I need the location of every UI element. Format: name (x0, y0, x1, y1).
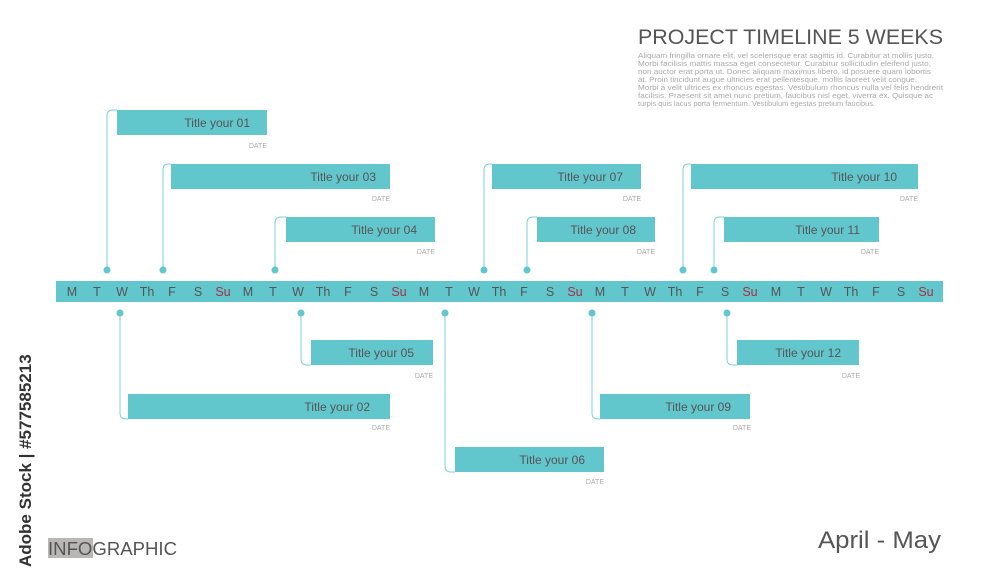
timeline day bar: W (292, 285, 304, 299)
timeline day bar: T (269, 285, 277, 299)
event 01: DATE (249, 143, 267, 150)
timeline day bar: W (468, 285, 480, 299)
event 09 (600, 394, 751, 432)
timeline day bar: F (696, 285, 704, 299)
timeline day bar: Th (844, 285, 858, 299)
event 01: Title your 01 (184, 116, 250, 130)
timeline day bar: T (93, 285, 101, 299)
event 04 (286, 217, 435, 256)
infographic label: INFOGRAPHIC (48, 539, 177, 559)
event 05 (311, 340, 433, 380)
timeline day bar: Su (742, 285, 758, 299)
timeline day bar: T (445, 285, 453, 299)
event 11: Title your 11 (795, 223, 860, 237)
timeline day bar: W (820, 285, 832, 299)
description text: non auctor erat porta ut. Donec aliquam maximus libero, id posuere quam lobortis (638, 69, 932, 76)
description text (638, 53, 943, 108)
event 04: DATE (417, 249, 435, 256)
event 07: Title your 07 (557, 170, 623, 184)
timeline day bar: S (897, 285, 905, 299)
event 07: DATE (623, 196, 641, 203)
event 09: DATE (733, 425, 751, 432)
description text: at. Proin tincidunt augue ultricies erat pellentesque, mollis laoreet velit congue. (638, 77, 917, 84)
timeline day bar: S (370, 285, 378, 299)
timeline day bar: Th (140, 285, 154, 299)
description text: turpis quis lacus porta fermentum. Vestibulum egestas pretium faucibus. (638, 101, 875, 108)
date range: April - May (818, 527, 941, 554)
event 09: Title your 09 (665, 400, 731, 414)
event 12: DATE (842, 373, 860, 380)
timeline day bar: W (116, 285, 128, 299)
timeline day bar: M (243, 285, 253, 299)
event 11 (724, 217, 879, 256)
event 12 (737, 340, 860, 380)
timeline day bar: Su (567, 285, 583, 299)
event 06: Title your 06 (519, 453, 585, 467)
timeline day bar: W (644, 285, 656, 299)
timeline day bar: Th (492, 285, 506, 299)
description text: Morbi a velit ultrices ex rhoncus egestas. Vestibulum rhoncus nulla vel felis hendrerit (638, 85, 943, 92)
description text: facilisis. Praesent sit amet nunc pretium, faucibus nisl eget, viverra ex. Quisque ac (638, 93, 934, 100)
event 06 (455, 447, 604, 486)
timeline day bar (56, 281, 943, 302)
watermark: Adobe Stock | #577585213 (16, 354, 35, 567)
timeline day bar: T (797, 285, 805, 299)
event 03 (171, 164, 390, 203)
event 04: Title your 04 (351, 223, 417, 237)
timeline day bar: Th (668, 285, 682, 299)
event 03: Title your 03 (310, 170, 376, 184)
timeline day bar: Su (391, 285, 407, 299)
event 02: Title your 02 (304, 400, 370, 414)
title: PROJECT TIMELINE 5 WEEKS (638, 26, 943, 49)
event 08: Title your 08 (570, 223, 636, 237)
event 06: DATE (586, 479, 604, 486)
timeline day bar: S (721, 285, 729, 299)
event 05: DATE (415, 373, 433, 380)
event 08 (537, 217, 655, 256)
timeline day bar: S (546, 285, 554, 299)
event 02: DATE (372, 425, 390, 432)
timeline day bar: M (595, 285, 605, 299)
timeline day bar: M (419, 285, 429, 299)
timeline day bar: Su (215, 285, 231, 299)
timeline day bar: F (344, 285, 352, 299)
timeline day bar: T (621, 285, 629, 299)
event 10: Title your 10 (831, 170, 897, 184)
timeline day bar: F (872, 285, 880, 299)
event 02 (128, 394, 390, 432)
event 01 (117, 110, 267, 150)
timeline day bar: Th (316, 285, 330, 299)
timeline day bar: S (194, 285, 202, 299)
event 03: DATE (372, 196, 390, 203)
event 10: DATE (900, 196, 918, 203)
timeline day bar: F (520, 285, 528, 299)
event 12: Title your 12 (775, 346, 841, 360)
description text: Morbi facilisis mattis massa eget consectetur. Curabitur sollicitudin eleifend justo, (638, 61, 931, 68)
event 11: DATE (861, 249, 879, 256)
timeline day bar: F (168, 285, 176, 299)
timeline day bar: M (771, 285, 781, 299)
event 05: Title your 05 (348, 346, 414, 360)
event 07 (492, 164, 641, 203)
timeline day bar: Su (918, 285, 934, 299)
event 08: DATE (637, 249, 655, 256)
connector lines (107, 110, 737, 472)
description text: Aliquam fringilla ornare elit, vel scelerisque erat sagittis id. Curabitur at mollis justo. (638, 53, 934, 60)
timeline day bar: M (67, 285, 77, 299)
dots (104, 266, 730, 316)
event 10 (691, 164, 918, 203)
